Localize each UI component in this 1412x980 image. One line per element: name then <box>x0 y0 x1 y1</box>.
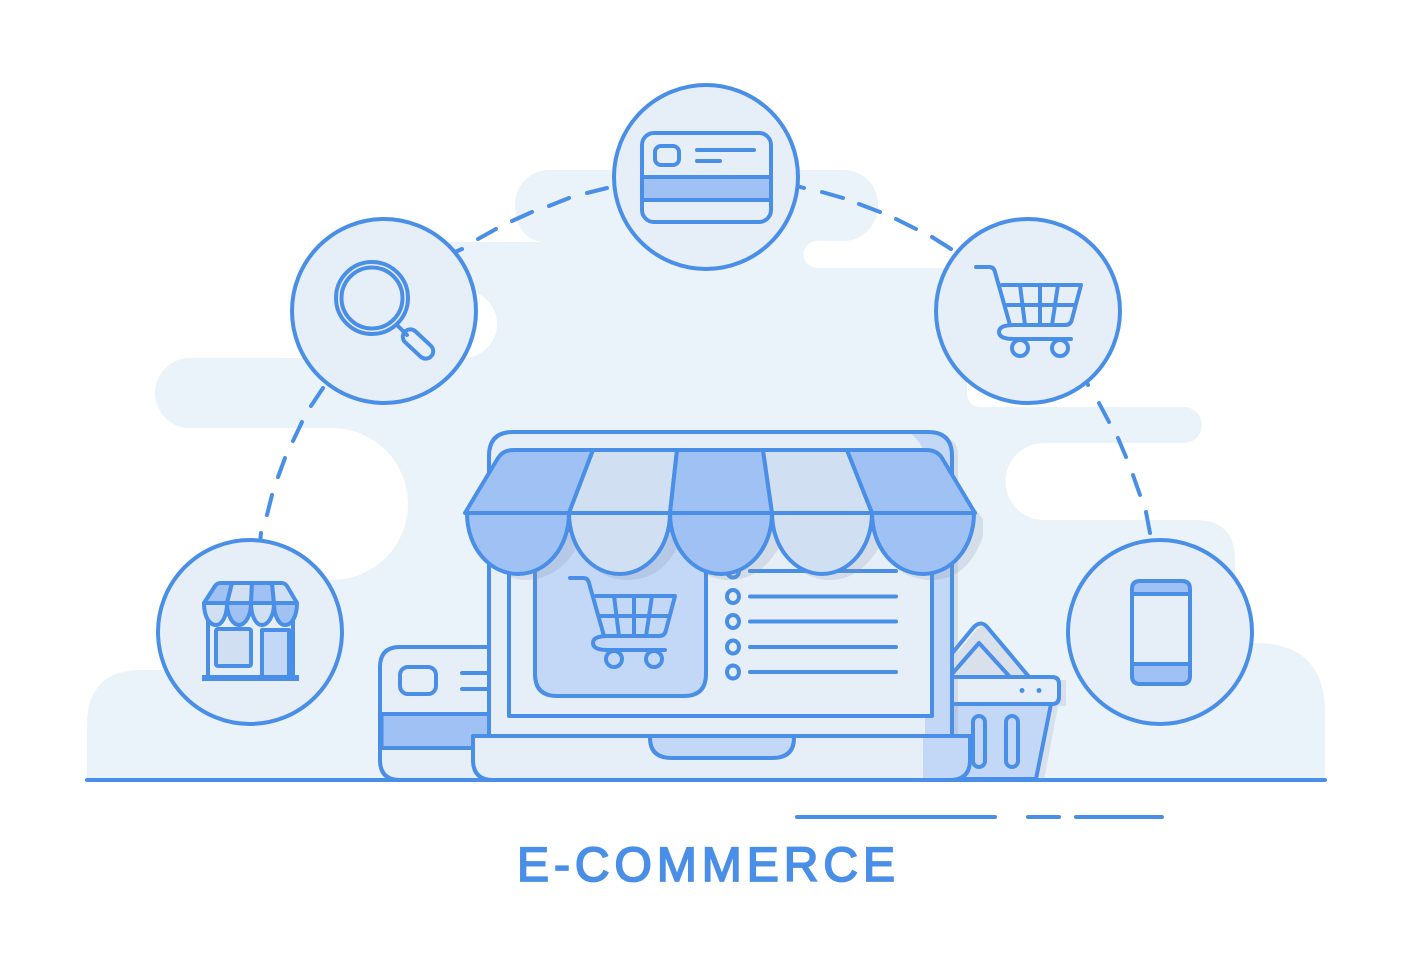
icon: credit card <box>642 133 771 222</box>
shopping basket <box>945 624 1066 780</box>
laptop screen <box>509 500 932 716</box>
title: E-COMMERCE <box>517 839 895 892</box>
icon: magnifying glass <box>336 262 436 362</box>
credit card behind laptop <box>380 647 500 780</box>
icon: store <box>203 583 298 680</box>
cart tile <box>535 530 706 696</box>
icon: smartphone <box>1132 581 1190 684</box>
awning <box>465 450 983 580</box>
icon circle: cart <box>936 219 1120 403</box>
ground line <box>87 778 1325 782</box>
icon circle: search <box>292 219 476 403</box>
icon: shopping cart <box>976 267 1081 356</box>
icon circle: payment card <box>614 85 798 269</box>
icon circle: smartphone <box>1068 540 1252 724</box>
laptop <box>473 432 970 780</box>
background cloud shape <box>87 170 1325 780</box>
laptop base <box>473 736 970 780</box>
icon circle: store <box>158 540 342 724</box>
cart on screen <box>570 578 675 667</box>
lower decorative lines <box>797 815 1162 819</box>
screen list <box>727 564 896 678</box>
dashed connecting arc <box>260 186 1150 542</box>
